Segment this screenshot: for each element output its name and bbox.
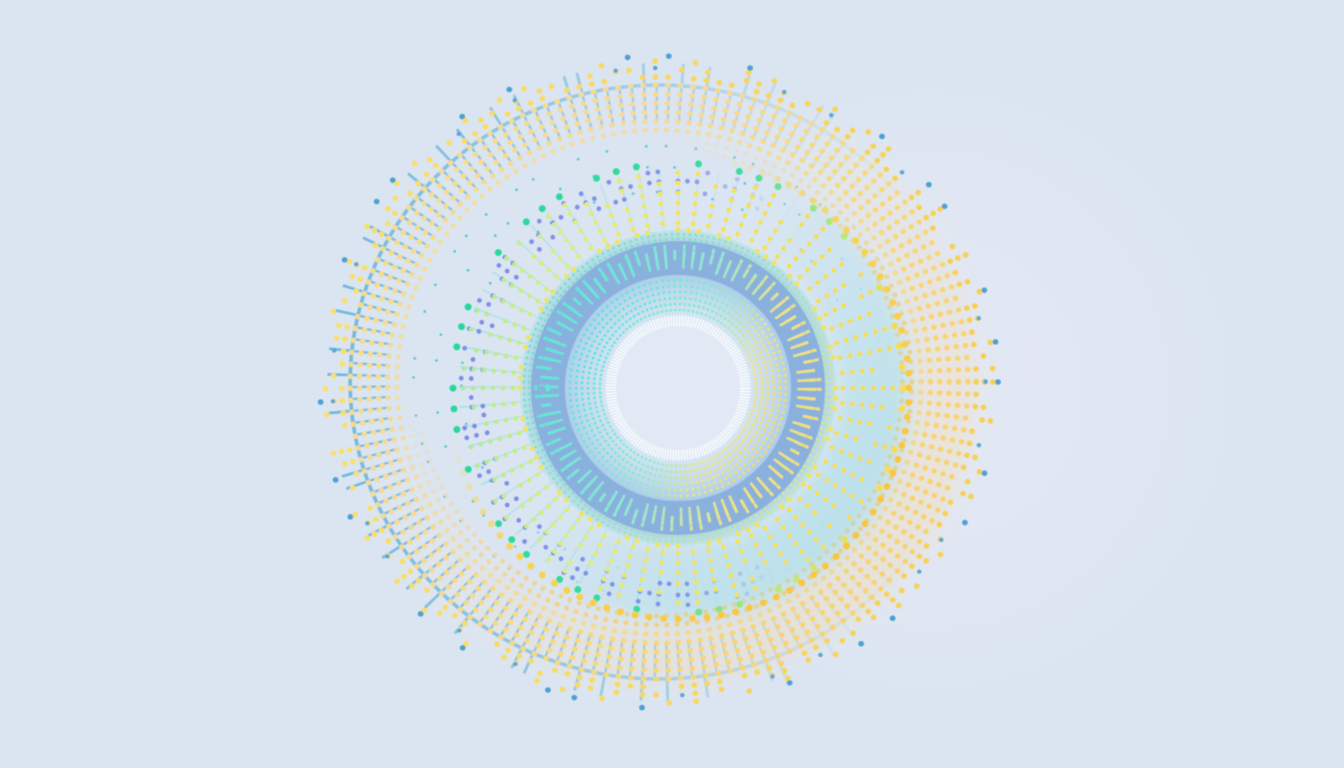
blue arc xyxy=(350,85,968,679)
center hole xyxy=(616,326,740,450)
blue spoke tips xyxy=(320,56,998,708)
green spoke tips xyxy=(453,163,903,613)
disc base xyxy=(520,230,836,546)
peach dot lattice xyxy=(350,85,968,679)
yellow right-side edge xyxy=(447,157,909,619)
yellow rim dots xyxy=(520,230,836,546)
blue radial spokes xyxy=(370,104,948,660)
thin spokes xyxy=(490,200,866,576)
faint scattered inner dots xyxy=(414,146,904,618)
outer ring warm wash xyxy=(376,110,942,654)
middle spoke ring xyxy=(447,157,909,619)
disc outer edge dots xyxy=(524,234,832,542)
purple dots xyxy=(461,171,895,605)
yellow spoke tips xyxy=(325,61,993,703)
tip spoke stems xyxy=(339,74,979,690)
warm extension on the right side xyxy=(406,139,912,625)
white spoke burst xyxy=(611,321,745,455)
inner disc xyxy=(520,230,836,546)
blue band xyxy=(548,258,808,518)
yellow-green dots xyxy=(463,173,893,603)
outer dotted ring xyxy=(320,56,998,708)
band tick marks xyxy=(537,247,819,529)
cyan wash xyxy=(483,193,873,583)
dense dot rings xyxy=(570,280,786,496)
